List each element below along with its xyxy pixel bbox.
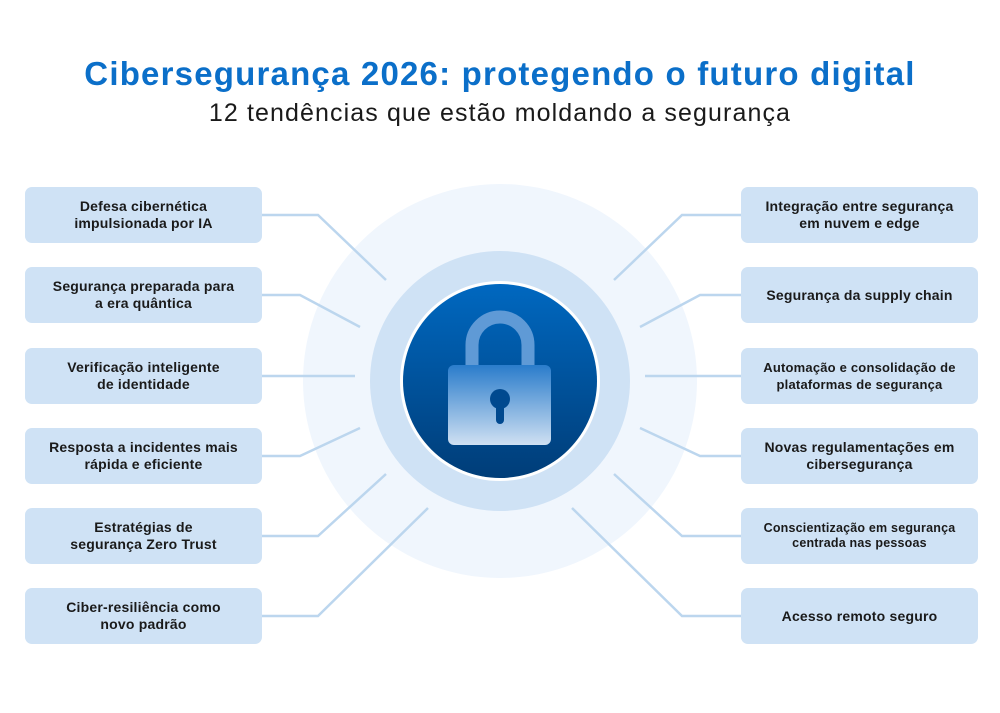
- left trend 2: Segurança preparada para: [53, 278, 234, 294]
- left trend 6: [25, 588, 262, 644]
- right trend 2: Segurança da supply chain: [766, 286, 953, 302]
- right trend 3: Automação e consolidação de: [763, 360, 956, 375]
- left trend 5: Estratégias de: [94, 519, 193, 535]
- left trend 2: a era quântica: [95, 295, 192, 311]
- right trend 5: centrada nas pessoas: [792, 536, 927, 550]
- right trend 5: Conscientização em segurança: [764, 521, 955, 535]
- icon: padlock: [448, 317, 551, 445]
- left trend 1: Defesa cibernética: [80, 198, 207, 214]
- right trend 2: [741, 267, 978, 323]
- left trend 3: [25, 348, 262, 404]
- right trend 4: [741, 428, 978, 484]
- left trend 4: [25, 428, 262, 484]
- right trend 3: [741, 348, 978, 404]
- right trend 5: [741, 508, 978, 564]
- left trend 5: [25, 508, 262, 564]
- left trend 1: impulsionada por IA: [74, 215, 213, 231]
- left trend 4: rápida e eficiente: [84, 456, 202, 472]
- title: Cibersegurança 2026: protegendo o futuro digital: [84, 55, 916, 92]
- right trend 3: plataformas de segurança: [777, 377, 942, 392]
- left trend 3: de identidade: [97, 376, 190, 392]
- right trend 6: Acesso remoto seguro: [782, 608, 937, 624]
- connectors: [262, 215, 741, 616]
- left trend 1: [25, 187, 262, 243]
- left trend 6: novo padrão: [100, 616, 187, 632]
- left trend 3: Verificação inteligente: [67, 359, 220, 375]
- right trend 1: em nuvem e edge: [799, 215, 920, 231]
- right trend 1: [741, 187, 978, 243]
- left trend 2: [25, 267, 262, 323]
- right trend 4: cibersegurança: [806, 456, 913, 472]
- subtitle: 12 tendências que estão moldando a segurança: [209, 99, 791, 127]
- left trend 5: segurança Zero Trust: [70, 536, 217, 552]
- right trend 4: Novas regulamentações em: [764, 439, 954, 455]
- left trend 6: Ciber-resiliência como: [66, 599, 221, 615]
- right trend 1: Integração entre segurança: [765, 198, 954, 214]
- right trend 6: [741, 588, 978, 644]
- left trend 4: Resposta a incidentes mais: [49, 439, 238, 455]
